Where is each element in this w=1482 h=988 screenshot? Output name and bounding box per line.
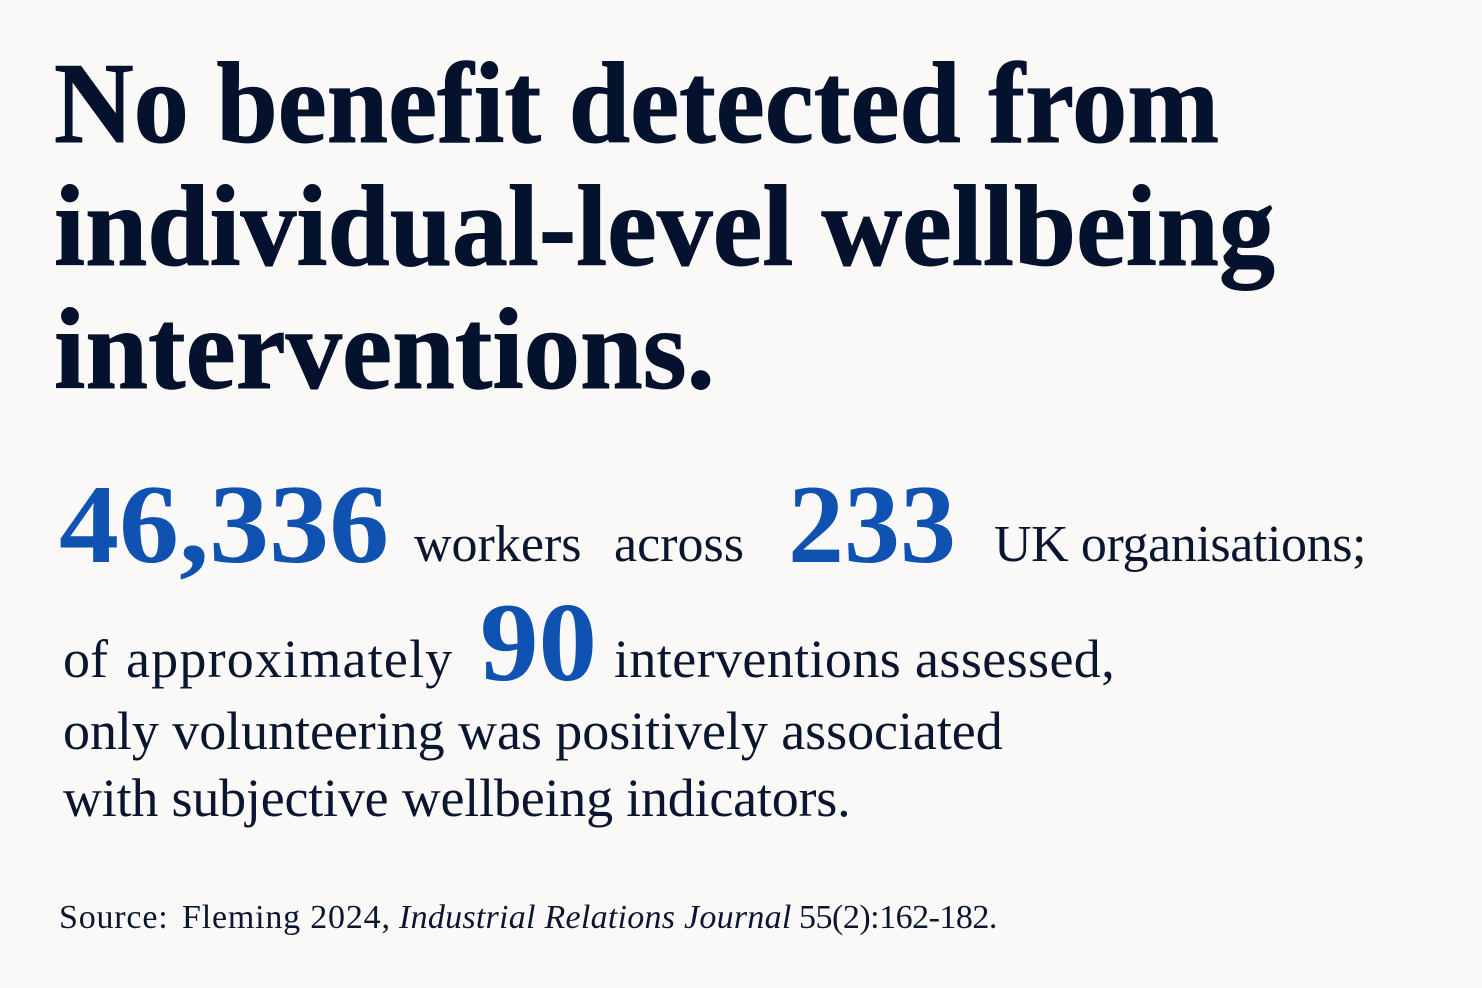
- statistic: interventions: 90: [480, 581, 597, 705]
- title: No benefit detected from: [54, 40, 1219, 168]
- source citation: 55(2):162-182.: [799, 899, 997, 936]
- text: subjective wellbeing: with subjective wellbeing indicators.: [63, 768, 850, 828]
- text: interventions assessed: interventions assessed,: [614, 629, 1115, 689]
- statistic: organisations: 233: [788, 463, 956, 587]
- source citation: Source:: [59, 899, 168, 936]
- source citation: [59, 899, 997, 936]
- title: interventions.: [54, 286, 715, 414]
- title: [54, 40, 1275, 414]
- text: only volunteering: only volunteering was positively associated: [63, 701, 1003, 761]
- text: across: across: [614, 516, 744, 573]
- text: of: of: [63, 629, 108, 689]
- title: individual-level wellbeing: [54, 163, 1275, 291]
- source citation: Industrial Relations Journal: [399, 899, 792, 936]
- text: workers: workers: [414, 516, 582, 573]
- statistic: workers: 46,336: [59, 463, 389, 587]
- text: UK organisations: UK organisations;: [994, 516, 1366, 573]
- source citation: Fleming 2024,: [182, 899, 391, 936]
- text: approximately: approximately: [126, 629, 454, 689]
